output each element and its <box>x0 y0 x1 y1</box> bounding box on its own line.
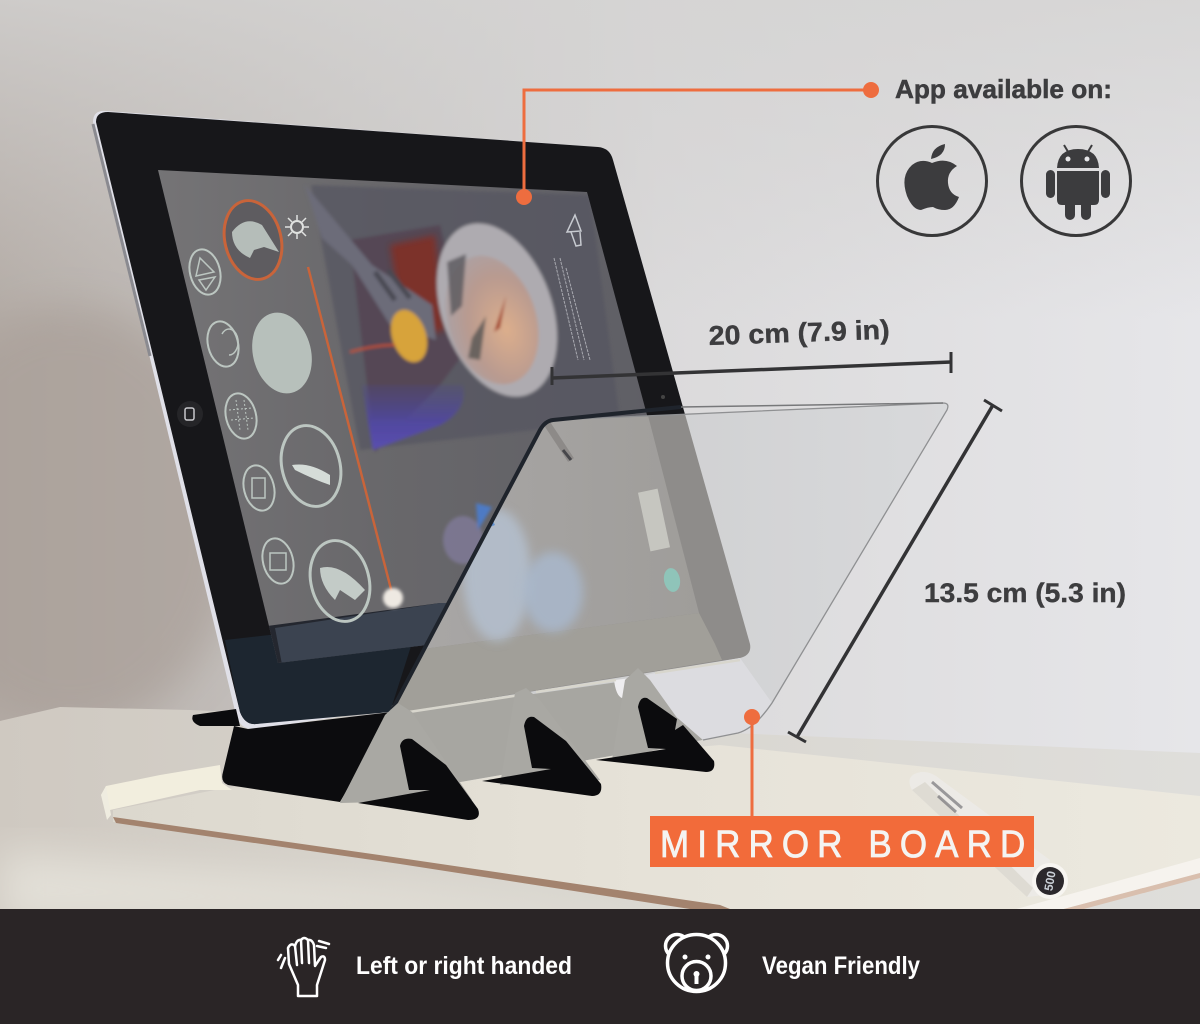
callout: mirror board leader <box>744 709 760 818</box>
strip under the tablet edge <box>412 682 702 782</box>
foot: middle <box>482 717 601 796</box>
gray triangle tabs of mirror <box>340 668 680 803</box>
lower bezel through mirror <box>385 613 722 715</box>
mirror top edge <box>553 403 948 740</box>
background: wall <box>0 0 1200 780</box>
icon: hand <box>278 938 329 996</box>
sketch board <box>101 745 1200 910</box>
label: mirror board: MIRROR BOARD <box>660 823 1025 865</box>
dark lower reflection band <box>269 603 440 663</box>
see-through tablet body <box>428 414 750 707</box>
text: left or right handed: Left or right handed <box>356 952 572 980</box>
icon: bear <box>666 934 728 992</box>
app ui: tool rings <box>185 246 378 628</box>
foot: right <box>596 698 714 772</box>
footer band <box>0 909 1200 1024</box>
dimension: width line <box>552 352 951 385</box>
tablet <box>93 111 750 729</box>
dimension: depth line <box>788 400 1002 742</box>
mirror board panel <box>340 400 948 803</box>
highlight strips along the tablet edge <box>409 660 740 712</box>
stand back base <box>192 709 392 802</box>
marker pen: 500 <box>1041 870 1059 892</box>
icon: apple <box>878 126 986 236</box>
label: width: 20 cm (7.9 in) <box>708 315 890 351</box>
illustration: character hair and face <box>305 185 620 452</box>
tablet screen <box>158 170 647 663</box>
torn paper corner <box>101 765 232 810</box>
slider <box>308 267 393 597</box>
heading: app available: App available on: <box>895 74 1112 104</box>
callout: app line with dots <box>516 82 879 205</box>
icon: android <box>1022 126 1130 236</box>
illustration: lower reflection shapes <box>443 503 492 564</box>
board edge <box>113 817 730 909</box>
see-through tablet screen <box>427 416 699 648</box>
mirror slot notch <box>614 678 632 698</box>
reflected shapes <box>463 509 531 641</box>
text: vegan friendly: Vegan Friendly <box>762 952 920 980</box>
home button <box>177 401 203 427</box>
marker pen <box>909 772 1068 899</box>
table surface <box>0 707 1200 925</box>
label: depth: 13.5 cm (5.3 in) <box>924 578 1126 608</box>
foot: front <box>358 739 479 820</box>
black stand feet <box>358 698 714 820</box>
